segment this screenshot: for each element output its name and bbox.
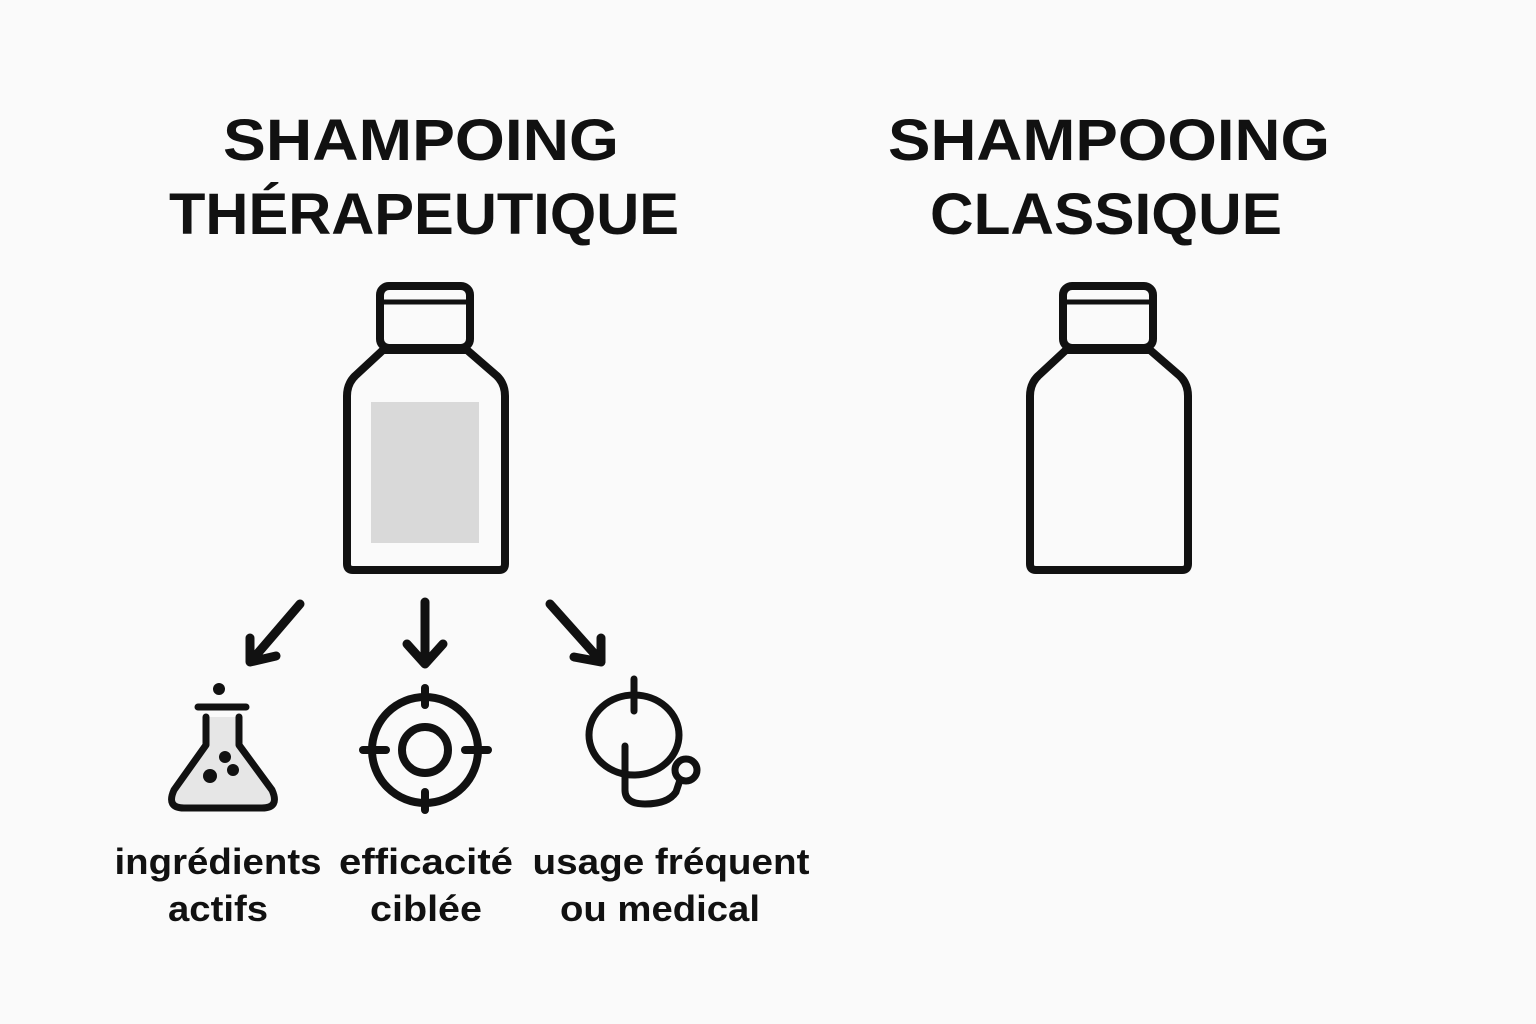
icon: classic bottle <box>1030 286 1188 570</box>
arrow: to targeted efficacy <box>407 602 443 664</box>
title: classic shampoo <box>888 108 1330 247</box>
label: frequent or medical use <box>532 841 810 929</box>
title: therapeutic shampoo <box>169 108 679 247</box>
label: active ingredients: ingrédients <box>114 841 322 882</box>
label: targeted efficacy <box>339 841 513 929</box>
label: targeted efficacy: ciblée <box>370 888 482 929</box>
label: frequent or medical use: ou medical <box>560 888 760 929</box>
label: active ingredients <box>114 841 322 929</box>
icon: therapeutic bottle <box>347 286 505 570</box>
icon: stethoscope <box>589 679 697 804</box>
title: classic shampoo: CLASSIQUE <box>930 182 1282 247</box>
label: frequent or medical use: usage fréquent <box>532 841 810 882</box>
icon: flask <box>172 683 274 808</box>
title: classic shampoo: SHAMPOOING <box>888 108 1330 173</box>
arrow: to active ingredients <box>250 604 300 662</box>
icon: target <box>363 688 488 810</box>
arrow: to frequent use <box>550 604 601 662</box>
label: targeted efficacy: efficacité <box>339 841 513 882</box>
title: therapeutic shampoo: THÉRAPEUTIQUE <box>169 182 679 247</box>
title: therapeutic shampoo: SHAMPOING <box>223 108 619 173</box>
label: active ingredients: actifs <box>168 888 268 929</box>
